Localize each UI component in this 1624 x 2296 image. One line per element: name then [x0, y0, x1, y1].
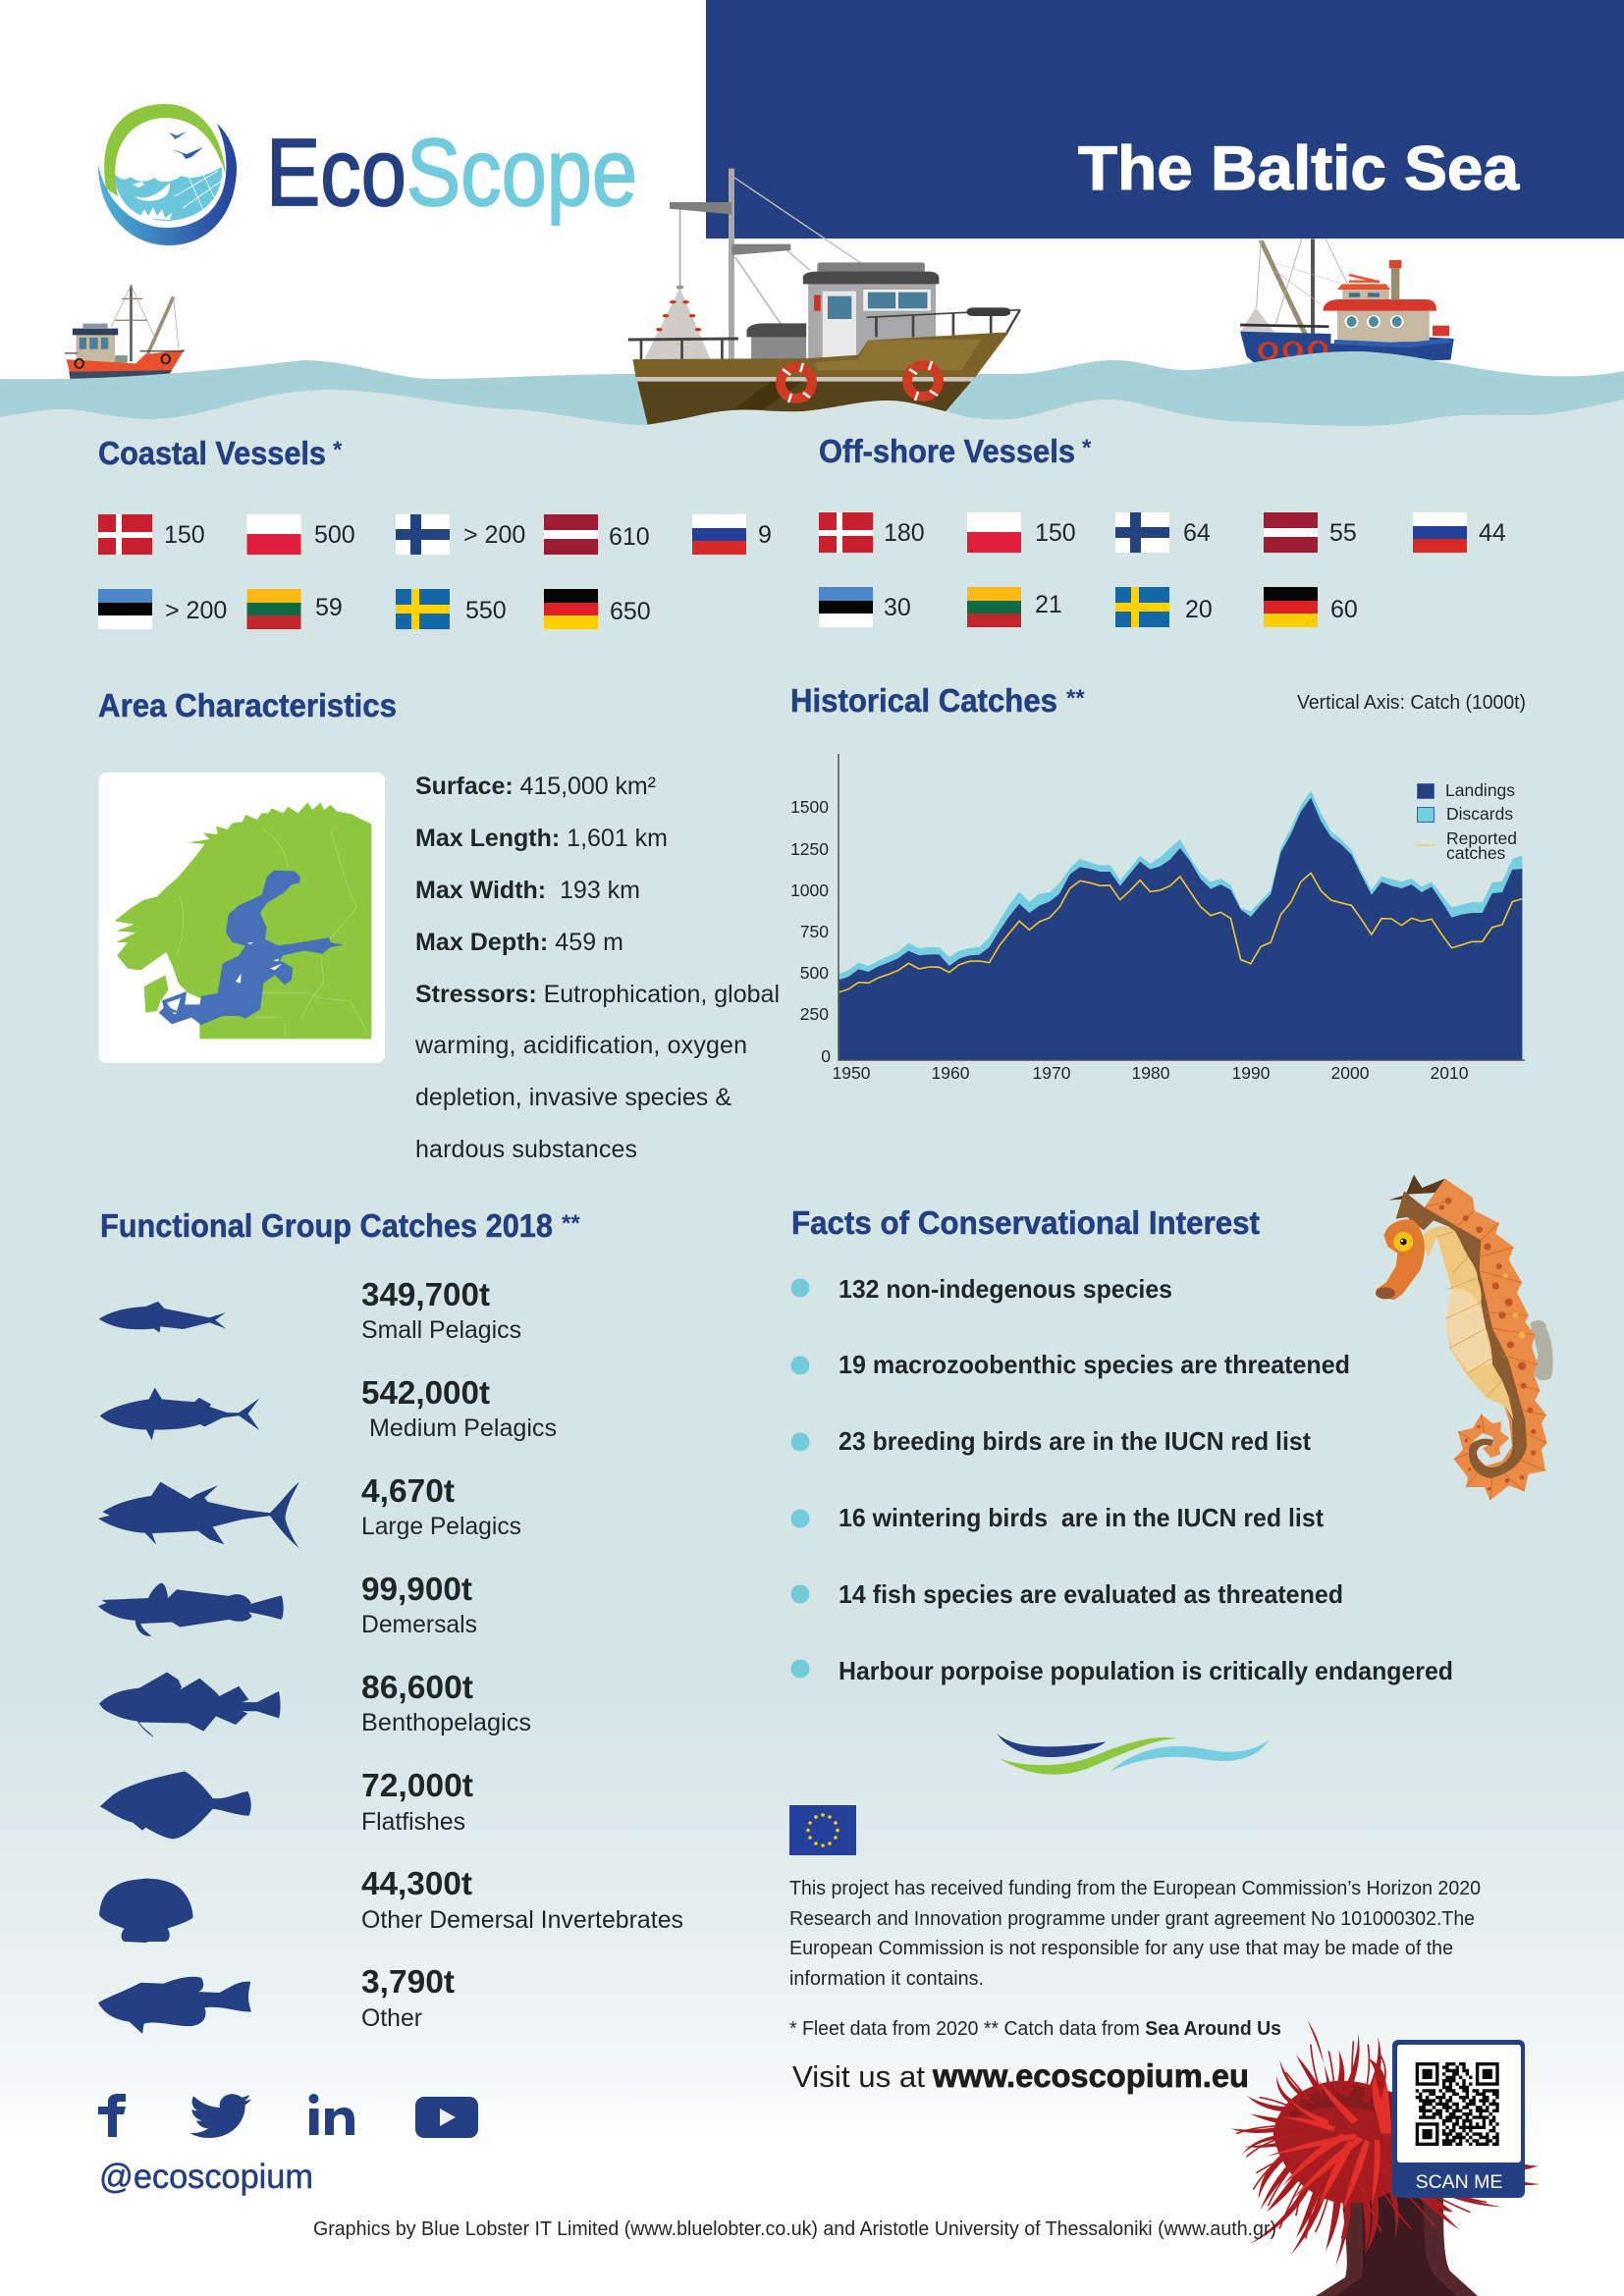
Finland off-shore	[1115, 512, 1211, 553]
y axis labels: 0	[821, 1046, 831, 1066]
legend: Reported	[1446, 828, 1517, 848]
Lithuania off-shore	[967, 587, 1062, 627]
heading: functional group catches: **	[562, 1210, 580, 1237]
website call to action: www.ecoscopium.eu	[932, 2057, 1249, 2094]
icon: main fishing boat	[628, 169, 1020, 425]
scan me label: SCAN ME	[1416, 2171, 1502, 2193]
other demersal invertebrates value: 44,300t	[361, 1865, 472, 1901]
heading: off-shore vessels: Off-shore Vessels	[819, 433, 1075, 469]
title banner	[706, 0, 1624, 239]
panel: conservation facts list	[791, 1274, 1453, 1685]
text block: funding statement	[789, 1878, 1481, 1990]
flatfishes value: Flatfishes	[361, 1808, 465, 1836]
Sweden off-shore: 20	[1185, 596, 1213, 623]
panel: map of the Baltic	[98, 773, 385, 1063]
Germany off-shore: 60	[1330, 596, 1358, 623]
Latvia off-shore: 55	[1329, 519, 1357, 547]
footnote: * Fleet data from 2020 ** Catch data from Sea Around Us	[789, 2018, 1281, 2040]
title: The Baltic Sea	[1078, 134, 1520, 203]
Poland coastal: 500	[314, 521, 355, 549]
Finland off-shore: 64	[1183, 519, 1211, 547]
Germany off-shore	[1264, 587, 1358, 627]
fact 2: 19 macrozoobenthic species are threatened	[839, 1350, 1350, 1379]
Latvia coastal	[544, 514, 650, 555]
x axis labels: 1970	[1033, 1063, 1071, 1083]
medium pelagics value	[361, 1374, 557, 1442]
icon: demersal fish	[98, 1583, 284, 1636]
small pelagics value: Small Pelagics	[361, 1316, 521, 1344]
heading: area characteristics: Area Characteristics	[98, 687, 397, 723]
text block: area characteristics: depletion, invasive species &	[415, 1084, 731, 1111]
icon: EU flag	[789, 1805, 856, 1855]
y axis labels: 1250	[790, 839, 829, 859]
Lithuania coastal	[247, 589, 343, 629]
x axis labels: 1990	[1232, 1063, 1271, 1083]
y axis labels: 750	[800, 922, 829, 941]
large pelagics value	[361, 1472, 521, 1540]
demersals value	[361, 1571, 477, 1638]
icon: flatfish	[100, 1771, 251, 1839]
other demersal invertebrates value: Other Demersal Invertebrates	[361, 1906, 683, 1934]
text block: area characteristics: Surface: 415,000 km²	[415, 773, 656, 800]
Denmark coastal	[98, 514, 205, 555]
medium pelagics value: Medium Pelagics	[369, 1415, 557, 1442]
Finland coastal: > 200	[463, 521, 525, 549]
text block: area characteristics: Max Width: 193 km	[415, 877, 640, 904]
small pelagics value: 349,700t	[361, 1276, 490, 1312]
x axis labels: 1960	[932, 1063, 970, 1083]
legend: catches	[1446, 843, 1506, 863]
fact 4: 16 wintering birds are in the IUCN red list	[839, 1503, 1324, 1532]
demersals value: 99,900t	[361, 1571, 472, 1607]
fact 1: 132 non-indegenous species	[839, 1274, 1172, 1304]
website call to action	[792, 2057, 1249, 2094]
discards area	[839, 791, 1522, 1060]
text block: funding statement: This project has received funding from the European Commission’s Horizon 2020	[789, 1878, 1481, 1899]
Lithuania coastal: 59	[315, 594, 343, 621]
medium pelagics value: 542,000t	[361, 1374, 490, 1411]
benthopelagics value	[361, 1669, 531, 1736]
Latvia off-shore	[1264, 512, 1357, 553]
other value	[361, 1963, 455, 2032]
Germany coastal	[544, 589, 651, 629]
heading: facts of conservational interest: Facts of Conservational Interest	[791, 1204, 1260, 1241]
fact 3: 23 breeding birds are in the IUCN red list	[839, 1426, 1311, 1456]
Estonia coastal	[98, 589, 227, 629]
Denmark off-shore: 180	[884, 519, 925, 547]
demersals value: Demersals	[361, 1611, 477, 1638]
benthopelagics value: 86,600t	[361, 1669, 473, 1705]
wordmark: EcoScope	[266, 119, 637, 226]
x axis labels	[833, 1063, 1469, 1083]
legend	[1416, 780, 1517, 863]
large pelagics value: Large Pelagics	[361, 1513, 521, 1540]
Sweden coastal	[396, 589, 507, 629]
heading: historical catches: Historical Catches	[790, 682, 1057, 719]
icon: seahorse	[1376, 1175, 1553, 1500]
text block: funding statement: European Commission is not responsible for any use that may be made of the	[789, 1938, 1453, 1959]
flatfishes value	[361, 1767, 473, 1836]
y axis labels: 500	[800, 963, 829, 983]
benthopelagics value: Benthopelagics	[361, 1709, 531, 1736]
panel: off-shore vessel flags	[819, 512, 1506, 627]
legend: Landings	[1445, 780, 1515, 800]
icon: life rings	[781, 361, 939, 402]
legend: Discards	[1446, 804, 1513, 824]
Latvia coastal: 610	[609, 523, 650, 551]
icon: facebook	[98, 2094, 126, 2137]
panel: functional group fish icons	[98, 1302, 299, 2034]
heading: functional group catches: Functional Group Catches 2018	[100, 1207, 553, 1244]
chart: historical catches area chart	[790, 754, 1525, 1083]
landings area	[839, 798, 1522, 1060]
Poland off-shore	[967, 512, 1076, 553]
heading: coastal vessels: Coastal Vessels	[98, 435, 326, 471]
fact 5: 14 fish species are evaluated as threatened	[839, 1579, 1343, 1609]
Poland coastal	[247, 514, 355, 555]
credits: Graphics by Blue Lobster IT Limited (www.bluelobter.co.uk) and Aristotle University of Thessaloniki (www.auth.gr)	[313, 2218, 1276, 2240]
icon: small pelagic fish	[99, 1302, 226, 1333]
icon: twitter	[189, 2094, 251, 2138]
text block: funding statement: Research and Innovation programme under grant agreement No 101000302.The	[789, 1908, 1475, 1930]
x axis labels: 2010	[1431, 1063, 1469, 1083]
icon: linkedin	[308, 2094, 354, 2135]
icon: large pelagic fish	[98, 1482, 299, 1548]
Russia off-shore	[1413, 512, 1506, 553]
Denmark coastal: 150	[164, 521, 205, 549]
small pelagics value	[361, 1276, 521, 1344]
QR code	[1416, 2064, 1499, 2144]
text block: funding statement: information it contains.	[789, 1968, 984, 1990]
text block: area characteristics: warming, acidification, oxygen	[414, 1032, 747, 1059]
axis caption: Vertical Axis: Catch (1000t)	[1297, 692, 1526, 714]
text block: area characteristics: Max Length: 1,601 km	[415, 825, 668, 852]
EcoScope logo	[98, 104, 637, 245]
heading: historical catches: **	[1066, 685, 1085, 712]
x axis labels: 1980	[1132, 1063, 1170, 1083]
icon: other fish	[98, 1977, 251, 2034]
sea anemone	[1230, 2021, 1540, 2296]
Finland coastal	[396, 514, 525, 555]
Russia coastal: 9	[758, 521, 772, 549]
social handle: @ecoscopium	[99, 2158, 313, 2196]
Estonia off-shore	[819, 587, 911, 627]
website call to action: Visit us at	[792, 2059, 925, 2094]
icon: blue boat	[1240, 239, 1454, 365]
flatfishes value: 72,000t	[361, 1767, 473, 1803]
QR code card	[1392, 2040, 1525, 2198]
icon: EcoScope waves divider	[997, 1734, 1269, 1775]
fact 6: Harbour porpoise population is critically endangered	[839, 1656, 1453, 1685]
Russia off-shore: 44	[1479, 519, 1506, 547]
y axis labels: 250	[800, 1004, 829, 1024]
text block: area characteristics: Stressors: Eutrophication, global	[415, 981, 780, 1008]
Sweden coastal: 550	[465, 597, 507, 624]
other demersal invertebrates value	[361, 1865, 683, 1934]
Denmark off-shore	[819, 512, 925, 553]
heading: off-shore vessels: *	[1082, 435, 1092, 461]
Lithuania off-shore: 21	[1035, 591, 1062, 618]
icon: scallop	[99, 1879, 193, 1943]
y axis labels: 1500	[790, 797, 829, 817]
x axis labels: 1950	[833, 1063, 871, 1083]
Poland off-shore: 150	[1035, 519, 1076, 547]
x axis labels: 2000	[1331, 1063, 1370, 1083]
panel: functional group values	[361, 1276, 683, 2032]
icon: medium pelagic fish	[100, 1388, 259, 1440]
Estonia off-shore: 30	[884, 594, 911, 621]
icon: youtube	[415, 2097, 478, 2138]
y axis labels: 1000	[790, 881, 829, 900]
reported catches line	[839, 873, 1522, 992]
Sweden off-shore	[1115, 587, 1213, 627]
text block: area characteristics: hardous substances	[415, 1136, 637, 1163]
icon: small red boat	[65, 285, 185, 380]
large pelagics value: 4,670t	[361, 1472, 455, 1509]
text block: area characteristics	[414, 773, 780, 1163]
other value: Other	[361, 2004, 422, 2032]
text block: area characteristics: Max Depth: 459 m	[415, 929, 623, 956]
icon: logo emblem	[98, 104, 237, 245]
heading: coastal vessels: *	[333, 437, 343, 463]
other value: 3,790t	[361, 1963, 455, 2000]
y axis labels	[790, 797, 831, 1066]
icon: benthopelagic fish	[99, 1672, 280, 1737]
Estonia coastal: > 200	[165, 597, 227, 624]
Russia coastal	[692, 514, 772, 555]
wave: back teal water	[0, 351, 1624, 589]
panel: coastal vessel flags	[98, 514, 772, 629]
Germany coastal: 650	[610, 598, 651, 625]
